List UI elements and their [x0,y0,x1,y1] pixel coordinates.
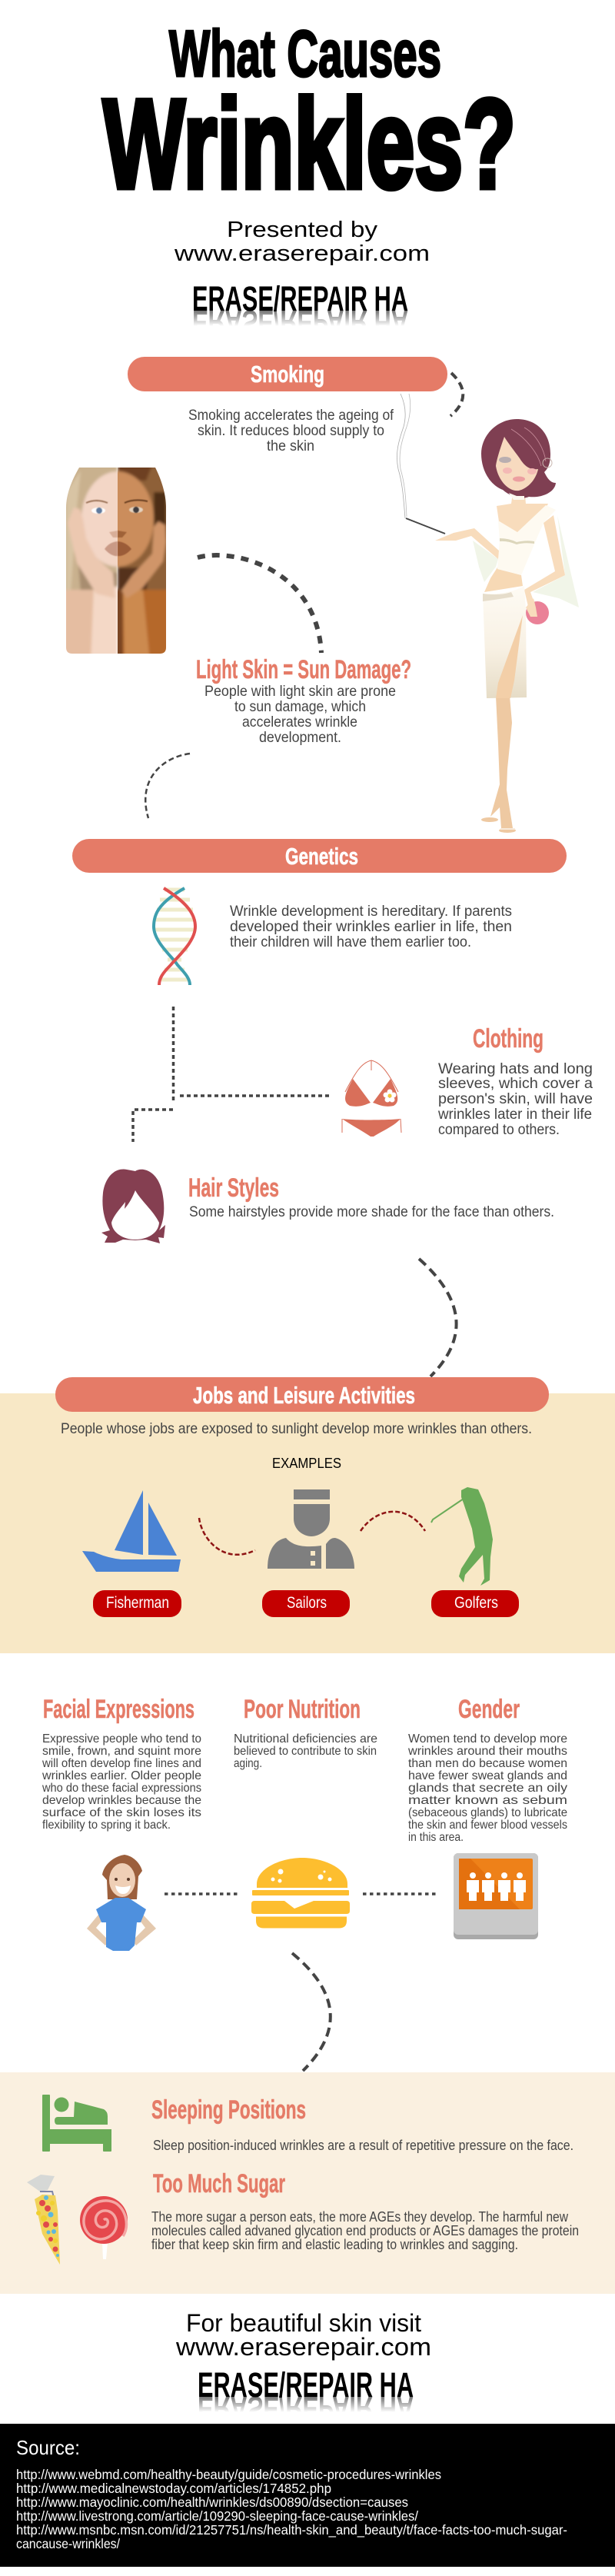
clothing text: person's skin, will have [438,1091,593,1107]
column: gender: glands that secrete an oily [408,1782,567,1795]
arrow: dashed curve to jobs [419,1259,457,1376]
neck and chest [497,488,548,538]
column: facial expressions: smile, frown, and squint more [42,1745,201,1758]
column: gender: matter known as sebum [408,1794,567,1807]
column: gender: (sebaceous glands) to lubricate [408,1806,567,1819]
smoking text: the skin [267,438,314,454]
hair [481,419,556,498]
light skin heading and text: to sun damage, which [234,699,366,715]
column: facial expressions: flexibility to spring it back. [42,1819,171,1832]
column: gender: wrinkles around their mouths [407,1745,567,1758]
presented by: www.eraserepair.com [174,241,430,266]
footer call to action: www.eraserepair.com [175,2333,431,2361]
column: facial expressions: will often develop fine lines and [42,1757,201,1770]
too much sugar heading and text: fiber that keep skin firm and elastic leading to wrinkles and sagging. [151,2237,518,2252]
icon: bikini [342,1060,401,1137]
icon: group of people tile [454,1853,538,1939]
arrow: dashed curve from smoking [450,373,463,416]
smoking text: skin. It reduces blood supply to [198,423,384,439]
title: What Causes [169,18,441,91]
logo: erase/repair ha: ERASE/REPAIR HA [192,279,408,318]
skirt [483,586,527,698]
panel: sources: http://www.msnbc.msn.com/id/21257751/ns/health-skin_and_beauty/t/face-facts-too-much-sugar- [16,2522,567,2538]
column: facial expressions: Expressive people who tend to [42,1732,201,1746]
panel: sources [0,2424,615,2567]
clothing text: compared to others. [438,1122,560,1138]
footer logo: ERASE/REPAIR HA [198,2365,414,2405]
jobs text: People whose jobs are exposed to sunlight develop more wrinkles than others. [61,1421,532,1437]
face [496,437,538,491]
dotted connector right [363,1892,436,1895]
flower [383,1089,397,1103]
light skin heading and text: Light Skin = Sun Damage? [196,655,411,684]
examples label: EXAMPLES [272,1456,341,1471]
arrow: thin dashed curve [145,754,190,818]
cigarette holder [406,518,445,534]
column: poor nutrition: Nutritional deficiencies are [234,1732,377,1746]
arrow: dashed curve to sleeping [292,1953,331,2071]
panel: smoking heading [128,357,447,391]
light skin heading and text: accelerates wrinkle [242,714,357,731]
photo: half light half tanned face [66,468,166,654]
logo: erase/repair ha: ERASE/REPAIR HA [192,303,408,342]
genetics text [230,904,512,950]
hair styles heading and text [188,1173,554,1220]
column: facial expressions: develop wrinkles because the [42,1794,201,1807]
panel: jobs and leisure background [0,1393,615,1653]
hair styles heading and text: Some hairstyles provide more shade for the face than others. [189,1204,554,1220]
column: gender [407,1695,567,1844]
label: sailors: Sailors [287,1594,327,1612]
panel: sources: Source: [16,2436,80,2459]
label: golfers [431,1590,519,1617]
label: sailors [262,1590,350,1617]
column: gender: Gender [458,1695,520,1724]
icon: dna [154,888,195,985]
arrow: dotted connector [133,1007,331,1142]
presented by: Presented by [227,218,378,242]
icon: lollipop [80,2196,128,2259]
too much sugar heading and text [151,2169,579,2252]
capes [533,515,579,607]
panel: sleeping and sugar background [0,2072,615,2294]
column: facial expressions: surface of the skin loses its [42,1806,201,1819]
tanned half [118,468,166,654]
icon: bed [42,2095,111,2152]
icon: golfer [431,1487,493,1586]
light skin heading and text: development. [259,730,341,746]
icon: uniformed person [268,1489,354,1569]
genetics text: their children will have them earlier too. [230,934,471,950]
icon: candy cone [27,2175,60,2265]
column: poor nutrition: Poor Nutrition [244,1695,361,1724]
title [103,18,516,215]
jobs heading [55,1377,549,1412]
smoking text: Smoking accelerates the ageing of [188,408,394,424]
panel: sources: cancause-wrinkles/ [16,2536,120,2551]
hair styles heading and text: Hair Styles [188,1173,279,1203]
column: facial expressions: Facial Expressions [43,1695,194,1724]
arrow: red dashed curve 1 [199,1518,255,1555]
light half [66,468,118,654]
genetics text: Wrinkle development is hereditary. If parents [230,904,512,920]
too much sugar heading and text: Too Much Sugar [153,2169,285,2198]
column: gender: Women tend to develop more [408,1732,567,1746]
dotted connector left [165,1892,239,1895]
logo: erase/repair ha [192,279,408,342]
label: golfers: Golfers [454,1594,498,1612]
icon: burger [251,1858,350,1929]
clothing heading: Clothing [473,1024,544,1053]
column: gender: than men do because women [408,1757,567,1770]
genetics text: developed their wrinkles earlier in life, then [230,919,512,935]
panel: sources: http://www.webmd.com/healthy-beauty/guide/cosmetic-procedures-wrinkles [16,2467,441,2482]
smoking text [188,408,394,454]
legs [490,696,513,828]
label: fisherman: Fisherman [106,1594,169,1612]
clutch [526,601,549,624]
footer call to action [175,2309,431,2361]
sleeping heading and text: Sleeping Positions [151,2095,306,2125]
clothing text [437,1061,593,1138]
clothing text: wrinkles later in their life [437,1107,592,1123]
panel: sources: http://www.mayoclinic.com/health/wrinkles/ds00890/dsection=causes [16,2494,408,2510]
column: poor nutrition: believed to contribute to skin [234,1745,377,1758]
label: fisherman [93,1590,181,1617]
panel: sources: http://www.livestrong.com/article/109290-sleeping-face-cause-wrinkles/ [16,2508,418,2524]
panel: smoking heading: Smoking [251,361,324,388]
illustration: woman with cigarette holder [397,394,579,833]
column: poor nutrition: aging. [234,1757,262,1770]
smoke [397,394,405,518]
panel: genetics heading [72,839,567,873]
light skin heading and text: People with light skin are prone [204,684,396,700]
icon: hair [101,1170,165,1243]
arrow: big dashed curve to light skin [198,555,321,653]
column: gender: in this area. [408,1831,464,1844]
footer logo: ERASE/REPAIR HA [198,2389,414,2428]
column: facial expressions: who do these facial expressions [42,1782,201,1795]
column: gender: the skin and fewer blood vessels [408,1819,567,1832]
footer call to action: For beautiful skin visit [186,2309,421,2337]
icon: sailboat [82,1490,181,1572]
midriff [484,567,523,592]
footer logo [198,2365,414,2428]
column: poor nutrition [234,1695,377,1770]
arms [435,528,500,559]
column: facial expressions [42,1695,201,1832]
arrow: red dashed curve 2 [361,1512,425,1531]
bodice [497,505,556,575]
column: gender: have fewer sweat glands and [408,1769,567,1782]
light skin heading and text [196,655,411,746]
clothing text: Wearing hats and long [438,1061,593,1077]
icon: smiling woman [87,1855,156,1951]
sleeping heading and text [151,2095,573,2153]
panel: genetics heading: Genetics [285,843,358,870]
panel: sources: http://www.medicalnewstoday.com/articles/174852.php [16,2481,331,2496]
presented by [174,218,430,266]
sleeping heading and text: Sleep position-induced wrinkles are a result of repetitive pressure on the face. [153,2138,573,2153]
jobs heading: Jobs and Leisure Activities [193,1382,415,1409]
column: facial expressions: wrinkles earlier. Older people [42,1769,201,1782]
clothing text: sleeves, which cover a [438,1076,593,1092]
